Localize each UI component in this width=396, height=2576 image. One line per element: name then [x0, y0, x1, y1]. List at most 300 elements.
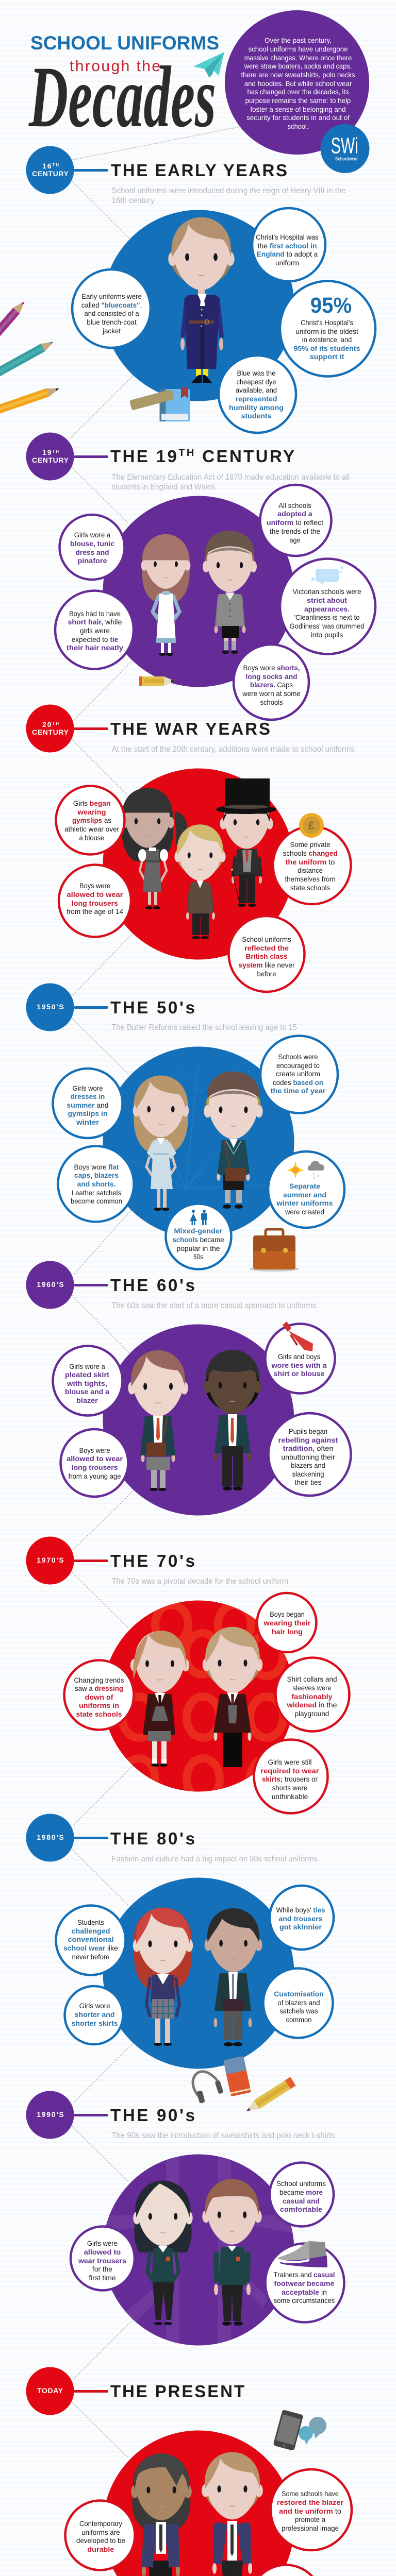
bubble: class system [229, 916, 304, 992]
panel: introduction [225, 10, 369, 155]
bubble: mixed gender: schools became [172, 1235, 224, 1244]
intro text: 16th century [111, 196, 155, 205]
intro text: The 90s saw the introduction of sweatshirts and polo neck t-shirts [111, 2131, 335, 2140]
bubble: restored blazer: restored the blazer [277, 2498, 344, 2506]
icon: pencil stub [139, 676, 175, 686]
bubble: durable: Contemporary [79, 2519, 122, 2528]
bubble: gymslips: athletic wear over [64, 825, 119, 833]
heading: THE 50's [110, 998, 195, 1017]
timeline marker: 20th century [26, 705, 108, 752]
icon: trainer [277, 2241, 327, 2267]
bubble: dresses [53, 1069, 123, 1138]
bubble: casual or formal [250, 2565, 322, 2576]
bubble: boys shorts: long socks and [245, 672, 297, 681]
figure: top hat boy [216, 778, 276, 907]
bubble: gymslips: wearing [77, 808, 106, 816]
panel: introduction: school uniforms have undergone [249, 45, 348, 53]
bubble: bluecoats: Early uniforms were [81, 292, 142, 300]
bubble: shirt collars: widened in the [286, 1701, 337, 1709]
bubble: skinnier ties: While boys' ties [276, 1906, 325, 1914]
bubble: flat caps: Boys wore flat [74, 1163, 119, 1171]
figure: bluecoat boy [168, 217, 235, 383]
heading: THE WAR YEARS [110, 719, 270, 738]
intro text: The 60s saw the start of a more casual approach to uniforms [111, 1301, 316, 1310]
bubble: dressing down: Changing trends [74, 1676, 124, 1684]
bubble: seasonal uniforms: were created [285, 1208, 324, 1216]
bubble: skinnier ties: got skinnier [279, 1923, 322, 1931]
bubble: required skirts: shorts were [272, 1784, 308, 1792]
logo: SWI badge: SWi [331, 133, 358, 159]
bubble: pleated skirt [53, 1346, 123, 1416]
section: 19th century [26, 433, 375, 720]
bubble: trainers: Trainers and casual [273, 2270, 335, 2279]
timeline marker: 19th century [26, 433, 108, 480]
timeline marker: 1960s [26, 1261, 108, 1309]
heading: TH [178, 447, 194, 459]
section: the war years [26, 705, 355, 992]
title: Decades [28, 48, 216, 145]
bubble: rebelling [268, 1413, 351, 1496]
timeline marker: 19th century: CENTURY [32, 456, 69, 464]
bubble: customisation: Customisation [274, 1990, 324, 1998]
bubble: uniform codes: codes based on [273, 1078, 323, 1087]
bubble: bluecoats: and consisted of a [85, 309, 139, 317]
figure: gymslip girl [121, 788, 187, 909]
icon: orange pencil left [0, 384, 61, 415]
bubble: shorter skirts: shorter and [75, 2010, 115, 2019]
bubble: mixed gender: 50s [193, 1252, 203, 1261]
intro text: The 70s was a pivotal decade for the school uniform [111, 1577, 288, 1586]
bubble: long hair: hair long [272, 1628, 303, 1636]
bubble: bluecoats: blue trench-coat [87, 318, 137, 326]
bubble: skinnier ties: and trousers [278, 1914, 323, 1923]
bubble: trainers [265, 2241, 344, 2323]
bubble: girls blouse: Girls wore a [74, 531, 110, 539]
bubble: private schools: Some private [290, 840, 331, 849]
bubble: 95 percent: support it [310, 352, 344, 361]
bubble: girls blouse: blouse, tunic [70, 539, 114, 548]
bubble: short hair: short hair, while [68, 618, 122, 626]
timeline marker: 16th century [26, 146, 108, 194]
logo: SWI badge [321, 124, 369, 173]
bubble: dressing down: state schools [76, 1710, 122, 1718]
figure: 50s boy [204, 1072, 263, 1209]
section: the 50s [26, 983, 344, 1272]
bubble: restored blazer: promote a [295, 2515, 325, 2523]
bubble: blue dye [219, 355, 296, 433]
bubble: dressing down: down of [85, 1693, 113, 1701]
figure: 70s boy [203, 1627, 262, 1767]
bubble: uniform codes: create uniform [276, 1070, 320, 1078]
bubble: private schools: the uniform to [286, 858, 335, 866]
figure: present girl [131, 2453, 192, 2576]
bubble: short hair: expected to tie [72, 635, 119, 643]
section: the 70s [26, 1536, 350, 1814]
title: SCHOOL UNIFORMS [30, 32, 219, 54]
panel circle [103, 210, 294, 401]
icon: red tie [283, 1321, 313, 1351]
bubble: blue dye: students [241, 412, 272, 420]
bubble: durable: uniforms are [81, 2528, 120, 2536]
bubble: long trousers: Boys were [79, 1446, 110, 1454]
bubble: required skirts: required to wear [261, 1767, 319, 1775]
bubble: skinnier ties [270, 1886, 334, 1950]
bubble: challenged: school wear like [63, 1944, 118, 1952]
intro text: Fashion and culture had a big impact on 80s school uniforms [111, 1855, 318, 1863]
bubble: challenged: Students [77, 1918, 104, 1926]
bubble: dresses: gymslips in [68, 1109, 107, 1117]
bubble: girls trousers [71, 2227, 135, 2291]
timeline marker: 20th century: 20 [42, 720, 52, 728]
icon: ruler [129, 389, 174, 411]
bubble: all schools [260, 485, 331, 556]
bubble: 95 percent: 95% [310, 293, 352, 318]
timeline marker: 16th century: CENTURY [32, 170, 69, 178]
bubble: casual comfortable: School uniforms [276, 2179, 326, 2188]
bubble: required skirts: unthinkable [272, 1792, 308, 1801]
panel circle [103, 2155, 294, 2346]
panel: introduction: Over the past century, [265, 36, 332, 44]
bubble: boys shorts: schools [260, 698, 283, 706]
bubble: required skirts: skirts; trousers or [262, 1775, 318, 1783]
bubble: flat caps: caps, blazers [74, 1171, 119, 1179]
timeline marker: 19th century: 19 [42, 448, 52, 456]
bubble: blue dye: available, and [236, 386, 277, 394]
bubble: 95 percent [280, 281, 375, 376]
bubble: shirt collars: Shirt collars and [287, 1675, 337, 1683]
panel: introduction: massive changes. Where once there [244, 54, 352, 62]
bubble: private schools: schools changed [283, 849, 337, 857]
figure: 60s boy [204, 1350, 261, 1490]
bubble: first school: the first school in [258, 242, 317, 250]
bubble: challenged: conventional [68, 1935, 113, 1943]
bubble: required skirts: Girls were still [268, 1758, 311, 1766]
bubble: flat caps [58, 1146, 134, 1222]
figure: 90s girl [133, 2180, 193, 2325]
panel circle [103, 769, 294, 959]
section: the present [26, 2367, 352, 2576]
figure: 90s boy [202, 2179, 262, 2326]
timeline marker: 16th century: 16 [42, 162, 52, 170]
bubble: shirt collars: sleeves were [293, 1684, 332, 1692]
icon: eraser [223, 2056, 251, 2096]
timeline marker: 20th century: TH [52, 721, 59, 726]
panel: introduction: were straw boaters, socks and caps, [244, 62, 352, 70]
intro text: The Elementary Education Act of 1870 made education available to all [111, 473, 350, 482]
bubble: 95 percent: uniform is the oldest [295, 327, 358, 335]
bubble: shirt collars: fashionably [292, 1692, 333, 1701]
bubble: 95 percent: 95% of its students [294, 344, 360, 352]
bubble: trainers: some circumstances [274, 2296, 335, 2304]
bubble: flat caps: Leather satchels [72, 1189, 121, 1197]
bubble: uniform codes: Schools were [278, 1053, 318, 1061]
intro text: students in England and Wales [111, 483, 215, 492]
timeline marker: 1990s: 1990'S [37, 2110, 64, 2119]
bubble: gymslips [56, 786, 125, 854]
bubble: long trousers: allowed to wear [67, 1454, 123, 1463]
intro text [111, 473, 350, 492]
bubble: first school: Christ's Hospital was [256, 233, 319, 241]
icon: girl and boy [190, 1210, 207, 1225]
icon: sun and rain cloud [287, 1161, 324, 1179]
icon: yellow pencil [243, 2077, 296, 2115]
bubble: rebelling: slackening [292, 1470, 324, 1478]
figure: victorian boy [203, 531, 257, 654]
logo: SWI badge: Schoolwear [335, 157, 358, 162]
icon: briefcase [250, 1229, 299, 1272]
timeline marker: 16th century: TH [52, 163, 59, 167]
figure: victorian girl [141, 534, 190, 656]
bubble: boys shorts: Boys wore shorts, [243, 664, 300, 672]
bubble: victorian schools [280, 558, 375, 654]
icon: teal pencil left [0, 338, 56, 379]
bubble: wore ties: shirt or blouse [273, 1369, 325, 1378]
bubble: girls blouse: pinafore [77, 556, 107, 565]
bubble: uniform codes: the time of year [270, 1087, 326, 1095]
panel: introduction: and hoodies. But while school wear [244, 79, 352, 88]
bubble: long trousers: allowed to wear [67, 890, 123, 899]
timeline marker: 1990s [26, 2091, 108, 2139]
section: the early years [26, 146, 375, 433]
bubble: gymslips: a blouse [79, 834, 105, 842]
bubble: all schools: adopted a [277, 510, 312, 518]
timeline marker: 1950s: 1950'S [37, 1003, 64, 1011]
panel circle [103, 1047, 294, 1238]
bubble: long hair: wearing their [263, 1619, 311, 1627]
bubble: private schools: state schools [290, 884, 330, 892]
bubble: all schools: All schools [278, 501, 311, 510]
bubble: dressing down: saw a dressing [75, 1684, 123, 1692]
bubble: challenged: challenged [71, 1927, 110, 1935]
bubble: 95 percent: in existence, and [302, 335, 352, 344]
bubble: first school [252, 208, 325, 281]
heading: THE 90's [110, 2106, 195, 2125]
bubble: challenged [56, 1905, 126, 1975]
bubble: long trousers: from a young age [69, 1472, 121, 1480]
bubble: private schools: distance [298, 866, 323, 874]
panel circle [103, 1600, 294, 1800]
heading: THE EARLY YEARS [111, 161, 287, 180]
bubble: seasonal uniforms: summer and [283, 1191, 326, 1199]
bubble: class system: British class [245, 952, 288, 960]
icon: headphones [193, 2072, 224, 2104]
bubble: seasonal uniforms [268, 1151, 344, 1228]
figure: blond boy [174, 824, 226, 939]
bubble: long hair: Boys began [270, 1610, 305, 1618]
bubble: pleated skirt: with tights, [67, 1379, 107, 1387]
timeline marker: today [26, 2367, 108, 2415]
bubble: casual comfortable: casual and [283, 2197, 320, 2205]
bubble: girls trousers: first time [89, 2274, 116, 2282]
bubble: uniform codes [260, 1036, 338, 1113]
bubble: dresses: Girls wore [72, 1084, 103, 1092]
panel circle [103, 2431, 294, 2576]
bubble: blue dye: cheapest dye [236, 378, 276, 386]
bubble: seasonal uniforms: Separate [289, 1182, 320, 1190]
panel circle [103, 496, 294, 687]
bubble: short hair: Boys had to have [69, 609, 121, 618]
bubble: shorter skirts: Girls wore [79, 2002, 110, 2010]
bubble: restored blazer: professional image [282, 2524, 339, 2532]
timeline marker: 1970s [26, 1536, 108, 1585]
bubble: class system: before [257, 970, 276, 978]
panel: introduction: school. [288, 122, 308, 130]
icon: soap: SOAP [319, 573, 335, 579]
icon: soap [311, 567, 343, 584]
bubble: private schools: themselves from [285, 875, 335, 883]
bubble: long trousers: Boys were [79, 882, 110, 890]
bubble: restored blazer [271, 2469, 352, 2550]
bubble: rebelling: rebelling against [278, 1436, 338, 1444]
bubble: rebelling: their ties [295, 1478, 322, 1486]
bubble: long trousers [61, 1429, 128, 1497]
bubble: durable: durable [87, 2545, 114, 2553]
bubble: wore ties: wore ties with a [271, 1361, 327, 1369]
bubble: rebelling: tradition, often [283, 1444, 333, 1452]
timeline marker: 1950s [26, 983, 108, 1031]
bubble: first school: uniform [275, 259, 299, 267]
intro text: The Butler Reforms raised the school leaving age to 15 [111, 1023, 297, 1032]
timeline marker: today: TODAY [37, 2386, 63, 2395]
bubble: girls trousers: Girls were [87, 2239, 118, 2247]
timeline marker: 1980s [26, 1814, 108, 1862]
timeline marker: 1970s: 1970'S [37, 1556, 64, 1564]
icon: book [160, 387, 190, 421]
bubble: long trousers [59, 865, 131, 937]
bubble: challenged: never before [72, 1953, 110, 1961]
icon: paper plane [193, 52, 224, 78]
bubble: victorian schools: Victorian schools were [293, 587, 361, 596]
intro text [111, 187, 345, 205]
bubble: blue dye: represented [235, 395, 277, 403]
bubble: first school: England to adopt a [257, 250, 318, 258]
bubble: customisation: common [286, 2015, 311, 2024]
panel: introduction: there are now sweatshirts, polo necks [241, 71, 355, 79]
bubble: dresses: dresses in [71, 1092, 105, 1100]
bubble: bluecoats: called "bluecoats", [81, 301, 142, 309]
bubble: customisation [263, 1968, 333, 2038]
panel: introduction: purpose remains the same: to help [245, 96, 351, 105]
figure: 60s girl [128, 1350, 188, 1491]
intro text: At the start of the 20th century, additions were made to school uniforms [111, 745, 355, 754]
figure: present boy [202, 2452, 263, 2576]
bubble: girls blouse [60, 515, 125, 580]
bubble: casual comfortable: comfortable [280, 2205, 322, 2213]
bubble: customisation: of blazers and [277, 1998, 320, 2007]
bubble: girls trousers: wear trousers [78, 2257, 126, 2265]
bubble: rebelling: Pupils began [289, 1427, 327, 1435]
bubble: casual comfortable: became more [279, 2188, 323, 2196]
heading: CENTURY [196, 447, 294, 466]
bubble: shorter skirts [65, 1986, 123, 2044]
bubble: gymslips: gymslips as [72, 816, 111, 824]
bubble: all schools: the trends of the [270, 527, 320, 535]
bubble: trainers: footwear became [274, 2279, 335, 2287]
bubble: boys shorts: were worn at some [242, 689, 301, 698]
bubble: shirt collars [275, 1658, 350, 1731]
bubble: mixed gender [166, 1204, 231, 1269]
bubble: pleated skirt: blouse and a [65, 1387, 109, 1396]
icon: pound coin [299, 813, 324, 838]
figure: 70s girl [130, 1631, 189, 1767]
bubble: long trousers: long trousers [72, 1463, 118, 1471]
bubble: flat caps: and shorts. [77, 1180, 116, 1188]
bubble: boys shorts [234, 645, 309, 720]
icon: pound coin: £ [308, 819, 315, 832]
bubble: dressing down [64, 1660, 134, 1730]
figure: 80s boy [205, 1908, 262, 2046]
bubble: flat caps: become common [71, 1197, 122, 1205]
bubble: durable [65, 2501, 135, 2570]
bubble: pleated skirt: Girls wore a [69, 1362, 105, 1370]
bubble: class system: School uniforms [242, 935, 291, 943]
bubble: long trousers: long trousers [72, 899, 118, 907]
bubble: trainers: acceptable in [282, 2288, 327, 2296]
timeline marker: 19th century: TH [52, 449, 59, 454]
section: the 60s [26, 1261, 351, 1516]
bubble: all schools: age [290, 536, 301, 544]
bubble: boys shorts: blazers. Caps [250, 681, 293, 689]
heading: THE 60's [110, 1276, 195, 1295]
panel: introduction: has changed over the decades, its [248, 88, 349, 96]
title: through the [70, 58, 160, 75]
heading: THE 70's [110, 1551, 195, 1570]
bubble: class system: reflected the [244, 944, 289, 952]
bubble: short hair: girls were [80, 626, 110, 635]
bubble: dresses: winter [76, 1118, 100, 1126]
bubble: mixed gender: Mixed-gender [174, 1227, 223, 1235]
bubble: pleated skirt: pleated skirt [65, 1370, 109, 1379]
icon: phone and speech bubbles [273, 2410, 326, 2451]
bubble: rebelling: blazers and [291, 1461, 325, 1469]
bubble: mixed gender: popular in the [176, 1244, 220, 1252]
bubble: shorter skirts: shorter skirts [72, 2019, 118, 2027]
panel circle [103, 1877, 294, 2069]
bubble: dresses: summer and [67, 1101, 108, 1109]
bubble: short hair: their hair neatly [67, 643, 123, 652]
bubble: casual comfortable [270, 2163, 334, 2227]
bubble: short hair [55, 590, 134, 669]
bubble: uniform codes: encouraged to [276, 1061, 320, 1070]
bubble: customisation: satchels was [279, 2007, 318, 2015]
heading: THE 19 [110, 447, 177, 466]
bubble: victorian schools: into pupils [311, 631, 343, 639]
timeline marker: 20th century: CENTURY [32, 728, 69, 736]
bubble: girls blouse: dress and [75, 548, 109, 556]
bubble: restored blazer: Some schools have [282, 2489, 339, 2498]
bubble: girls trousers: allowed to [84, 2248, 121, 2256]
bubble: dressing down: uniforms in [79, 1701, 119, 1709]
bubble: girls trousers: for the [92, 2265, 112, 2273]
bubble: 95 percent: Christ's Hospital's [301, 318, 353, 327]
bubble: victorian schools: 'Cleanliness is next to [294, 613, 360, 621]
bubble: victorian schools: strict about [307, 596, 347, 604]
heading: THE 80's [110, 1829, 195, 1848]
bubble: long hair [257, 1593, 317, 1652]
panel: introduction: security for students in and out of [246, 113, 350, 122]
icon: purple pencil left [0, 298, 28, 345]
timeline marker: 1980s: 1980'S [37, 1833, 64, 1841]
bubble: rebelling: unbuttoning their [282, 1453, 335, 1461]
panel circle [103, 1324, 294, 1516]
bubble: restored blazer: and tie uniform to [279, 2507, 341, 2515]
bubble: victorian schools: Godliness' was drummed [290, 622, 364, 630]
bubble: bluecoats [72, 269, 151, 348]
bubble: durable: developed to be [76, 2536, 125, 2545]
bubble: private schools [273, 813, 351, 904]
bubble: pleated skirt: blazer [76, 1396, 98, 1404]
intro text: School uniforms were introduced during the reign of Henry VIII in the [111, 187, 345, 195]
